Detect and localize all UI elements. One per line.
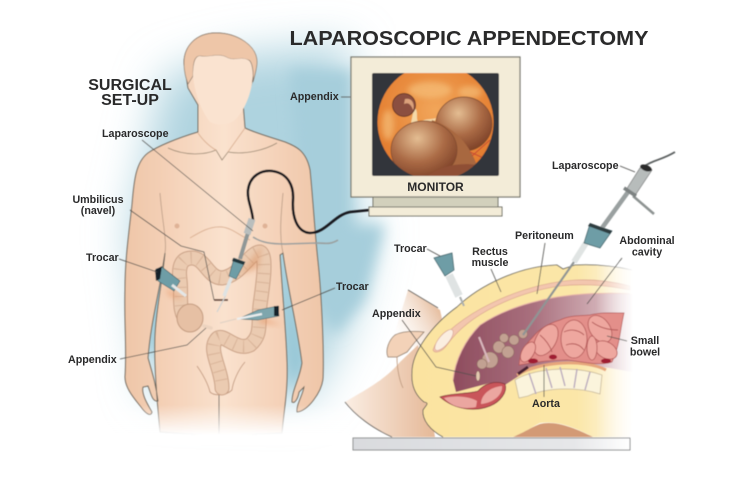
label: trocar right: Trocar [336, 281, 369, 293]
body bottom fade [100, 405, 350, 445]
colon in side view [477, 330, 528, 369]
rectus muscle band [433, 280, 630, 352]
incision [214, 299, 228, 301]
label: small bowel: bowel [630, 346, 660, 358]
back loop [436, 97, 492, 151]
icon: laparoscope in body [217, 219, 252, 312]
label: abdominal cavity: Abdominal [619, 235, 675, 247]
leader lines, side view [402, 166, 635, 397]
body outline [125, 33, 323, 436]
label: small bowel: Small [631, 335, 659, 347]
label: trocar side: Trocar [394, 243, 427, 255]
collarbones and chest details [168, 143, 277, 160]
side-view trocar [434, 253, 464, 306]
label: umbilicus: Umbilicus [72, 194, 124, 206]
label: laparoscope side: Laparoscope [552, 160, 619, 172]
label: laparoscope: Laparoscope [102, 128, 169, 140]
front loop [391, 121, 457, 179]
leader lines, front view [119, 97, 395, 359]
label: abdominal cavity: cavity [632, 246, 662, 258]
small bowel [517, 311, 624, 374]
face [193, 55, 252, 124]
label: rectus muscle: muscle [472, 257, 508, 269]
appendix globe [392, 94, 416, 116]
side-view laparoscope [523, 152, 675, 335]
appendix [204, 326, 211, 328]
background glow [130, 45, 372, 400]
label: aorta: Aorta [532, 398, 561, 410]
label: umbilicus: (navel) [81, 205, 116, 217]
icon: right trocar [220, 306, 279, 323]
label: appendix front: Appendix [68, 354, 117, 366]
trunk centre and crotch lines [218, 395, 220, 434]
endoscope view [376, 72, 494, 176]
bladder [440, 382, 506, 409]
monitor base [369, 207, 502, 216]
heading: surgical set-up: SET-UP [101, 92, 159, 109]
title: LAPAROSCOPIC APPENDECTOMY [290, 27, 649, 50]
labels [68, 27, 675, 410]
genital [387, 331, 424, 357]
stalk [410, 108, 436, 124]
label: appendix monitor: Appendix [290, 91, 339, 103]
orange glows [165, 288, 185, 300]
hair [184, 33, 257, 84]
figure: surgical set-up body [125, 33, 323, 436]
label: monitor: MONITOR [407, 180, 464, 194]
monitor case [351, 57, 520, 197]
side view: abdominal wall and body [412, 265, 632, 437]
label: trocar left: Trocar [86, 252, 119, 264]
monitor [351, 57, 520, 216]
right fade of the cross-section [596, 262, 634, 438]
side view: thigh and skin [345, 290, 445, 437]
label: peritoneum: Peritoneum [515, 230, 574, 242]
abdominal cavity [453, 293, 632, 392]
side view spine [515, 363, 606, 398]
arm inner lines [160, 193, 165, 253]
heading: surgical set-up: SURGICAL [88, 77, 172, 94]
side view appendix [476, 371, 480, 381]
buttock [513, 423, 593, 437]
label: appendix side: Appendix [372, 308, 421, 320]
light cable [253, 237, 338, 244]
monitor screen [372, 73, 499, 176]
cable to monitor [248, 171, 370, 233]
colon [165, 245, 282, 388]
label: rectus muscle: Rectus [472, 246, 508, 258]
cecum [177, 304, 203, 332]
table [353, 438, 630, 450]
icon: left trocar [155, 266, 186, 296]
monitor stand [373, 197, 498, 207]
